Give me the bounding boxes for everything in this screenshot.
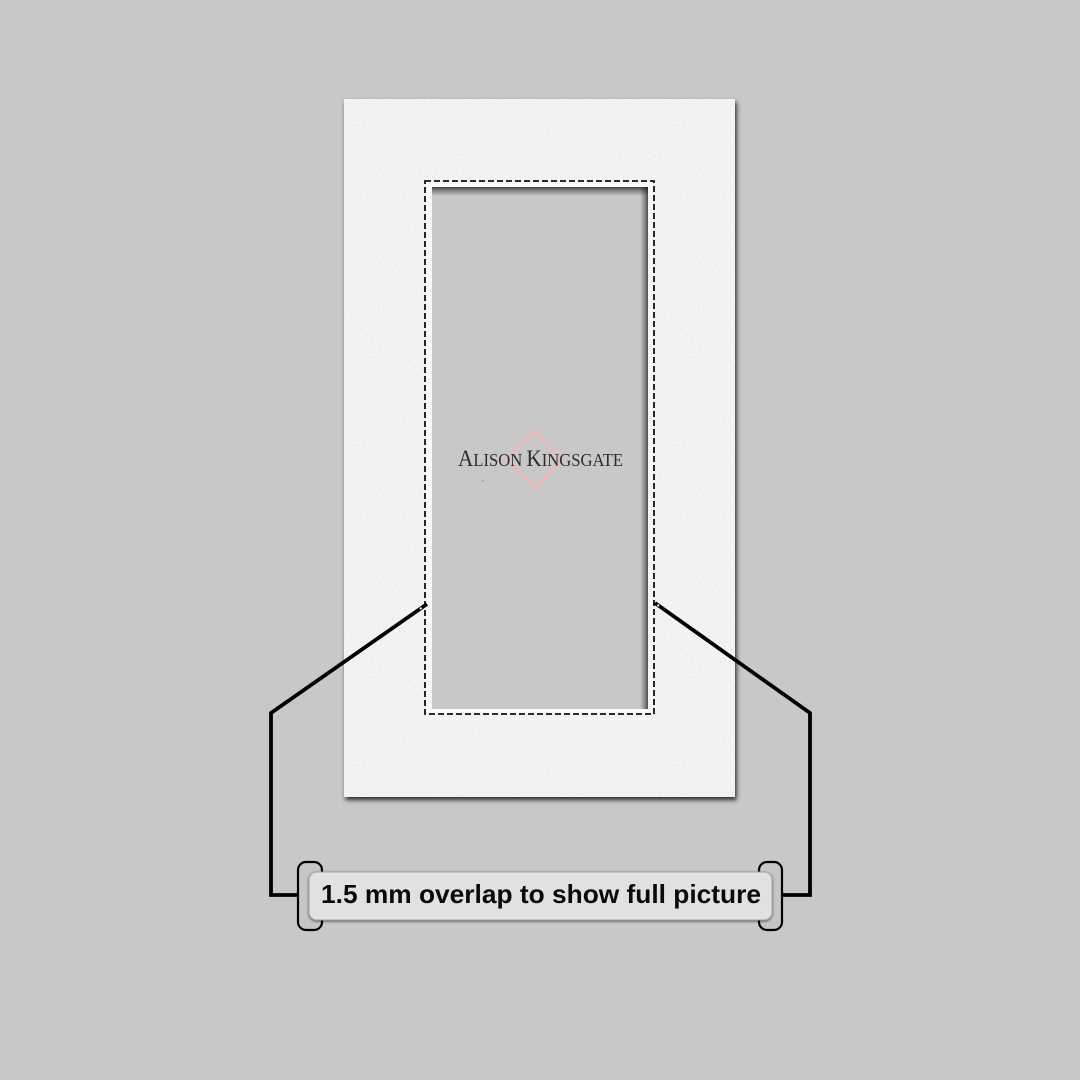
dashed overlap outline xyxy=(425,181,654,714)
callout text: 1.5 mm overlap to show full picture xyxy=(321,879,761,909)
left bracket cap xyxy=(298,862,322,930)
logo wordmark: ALISON KINGSGATE xyxy=(458,446,623,471)
logo diamond xyxy=(507,431,562,488)
callout label xyxy=(309,872,772,920)
right leader line xyxy=(655,603,810,895)
logo: Alison Kingsgate xyxy=(458,431,623,488)
window opening xyxy=(432,187,648,712)
panel: white mat board with window xyxy=(344,99,735,797)
right bracket cap xyxy=(759,862,782,930)
left leader line xyxy=(271,604,427,895)
